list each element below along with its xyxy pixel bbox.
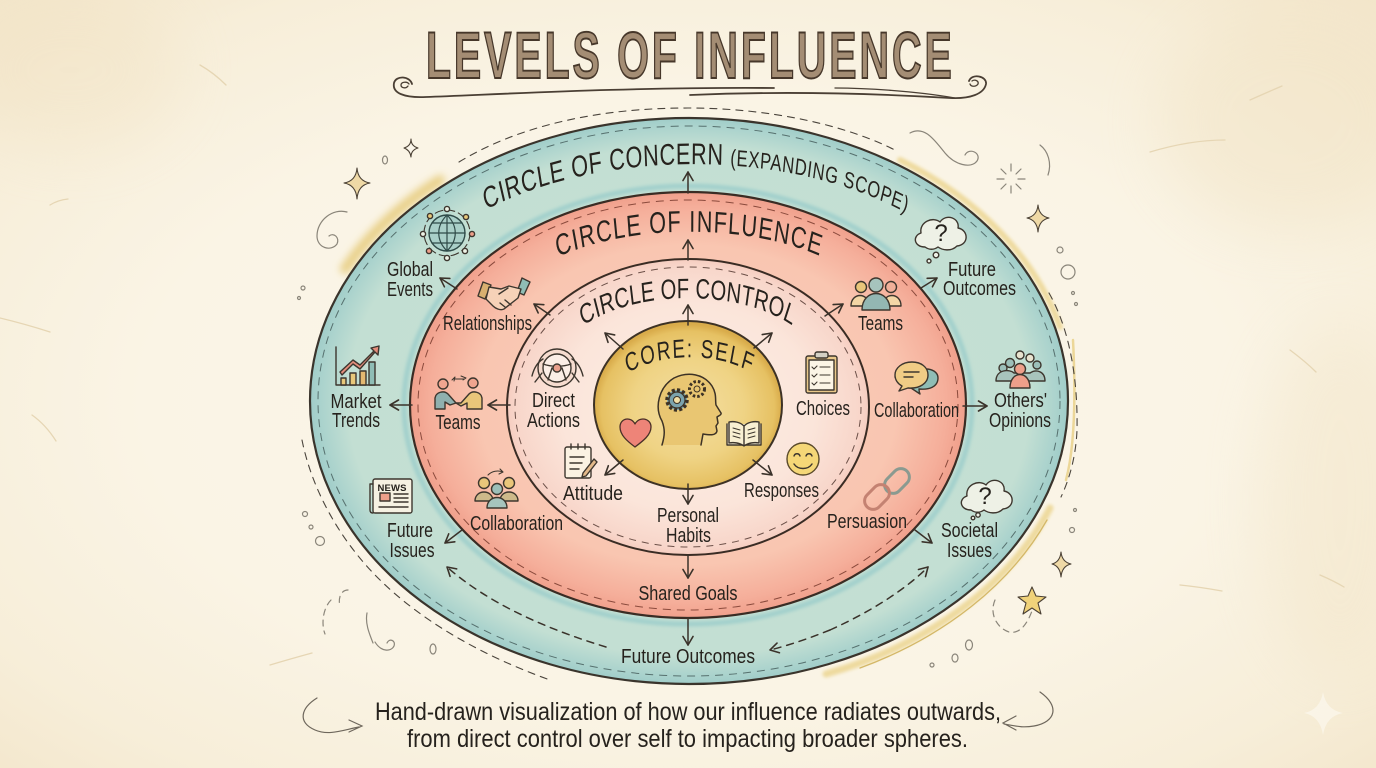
label: future outcomes right: Outcomes <box>943 278 1016 300</box>
icon: globe network <box>420 206 475 261</box>
icon: question cloud top: ? <box>934 220 948 247</box>
label: societal issues: Issues <box>947 540 992 562</box>
icon: heart <box>620 419 651 447</box>
label: global events: Events <box>387 279 433 301</box>
icon: question cloud bottom: ? <box>978 483 992 510</box>
decorative swirls and bubbles <box>298 131 1078 667</box>
label: future issues left: Future <box>387 520 433 542</box>
watermark sparkle <box>1304 692 1343 735</box>
label: market trends: Trends <box>332 410 380 432</box>
label: persuasion: Persuasion <box>827 511 907 533</box>
label: direct actions: Direct <box>532 390 575 412</box>
label: direct actions: Actions <box>527 410 580 432</box>
caption: Hand-drawn visualization of how our influence radiates outwards, <box>375 698 1001 726</box>
icon: chain link <box>861 465 913 513</box>
decorative burst <box>997 164 1025 193</box>
heading: core self: CORE: SELF <box>626 339 754 370</box>
label: others' opinions <box>989 390 1051 432</box>
label: relationships: Relationships <box>443 313 532 335</box>
title: LEVELS OF INFLUENCE <box>426 18 952 92</box>
label: societal issues: Societal <box>941 520 998 542</box>
label: market trends: Market <box>330 391 382 413</box>
heading: circle of control: CIRCLE OF CONTROL <box>580 278 792 325</box>
caption left arrow <box>303 698 362 733</box>
label: societal issues <box>941 520 998 562</box>
title underline flourish <box>394 76 986 98</box>
icon: steering wheel with hands <box>532 349 583 387</box>
label: personal habits: Habits <box>666 525 711 547</box>
icon: collaboration group <box>475 469 518 508</box>
label: collaboration left: Collaboration <box>470 513 563 535</box>
label: attitude: Attitude <box>563 483 623 505</box>
icon: clipboard checklist <box>806 352 837 393</box>
icon: notepad <box>565 444 597 478</box>
panel: core self <box>593 320 783 490</box>
label: shared goals: Shared Goals <box>638 583 738 605</box>
decorative sparkles and stars <box>344 139 1071 614</box>
icon: smiley face <box>787 443 819 475</box>
label: global events <box>387 259 433 301</box>
heading: circle of concern: CIRCLE OF CONCERN (EXPANDING SCOPE) <box>484 144 908 216</box>
arrows: from core to circle of control <box>605 305 772 504</box>
icon: crowd <box>996 351 1045 388</box>
label: future issues left <box>387 520 434 562</box>
label: others' opinions: Opinions <box>989 410 1051 432</box>
label: personal habits: Personal <box>657 505 719 527</box>
label: market trends <box>330 391 382 432</box>
label: teams left: Teams <box>436 412 480 434</box>
label: teams right: Teams <box>858 313 903 335</box>
arrows: dashed circulation in outer ring <box>447 567 928 650</box>
icon: head with gears <box>658 374 721 445</box>
icon: market trends chart <box>336 346 380 385</box>
label: future outcomes right: Future <box>948 259 996 281</box>
label: global events: Global <box>387 259 433 281</box>
panel: circle of concern <box>308 116 1070 686</box>
icon: team of three <box>851 278 901 310</box>
label: future outcomes bottom: Future Outcomes <box>621 646 755 668</box>
label: choices: Choices <box>796 398 850 420</box>
caption <box>375 698 1001 753</box>
panel: circle of control <box>506 258 870 556</box>
heading: circle of influence: CIRCLE OF INFLUENCE <box>556 211 822 256</box>
caption: from direct control over self to impacting broader spheres. <box>407 725 968 753</box>
icon: question cloud bottom <box>961 480 1012 520</box>
yellow pencil swashes behind the outer circle <box>345 160 1074 674</box>
icon: handshake <box>478 278 530 310</box>
panel: circle of influence <box>408 190 968 620</box>
icon: newspaper: NEWS <box>378 483 406 494</box>
caption right arrow <box>1003 692 1053 730</box>
icon: teams shaking hands <box>435 376 482 409</box>
icon: chat bubbles <box>895 362 938 394</box>
label: future issues left: Issues <box>390 540 434 562</box>
arrows: from circle of control to circle of influence <box>488 240 843 578</box>
icon: newspaper <box>370 479 412 513</box>
label: collaboration right: Collaboration <box>874 400 959 422</box>
label: others' opinions: Others' <box>994 390 1047 412</box>
outer dashed orbit <box>302 108 1077 680</box>
icon: open book <box>727 422 761 446</box>
label: responses: Responses <box>744 480 819 502</box>
arrows: from circle of influence to circle of concern <box>390 172 987 645</box>
label: personal habits <box>657 505 719 547</box>
label: future outcomes right <box>943 259 1016 300</box>
icon: question cloud top <box>915 217 966 263</box>
label: direct actions <box>527 390 580 432</box>
